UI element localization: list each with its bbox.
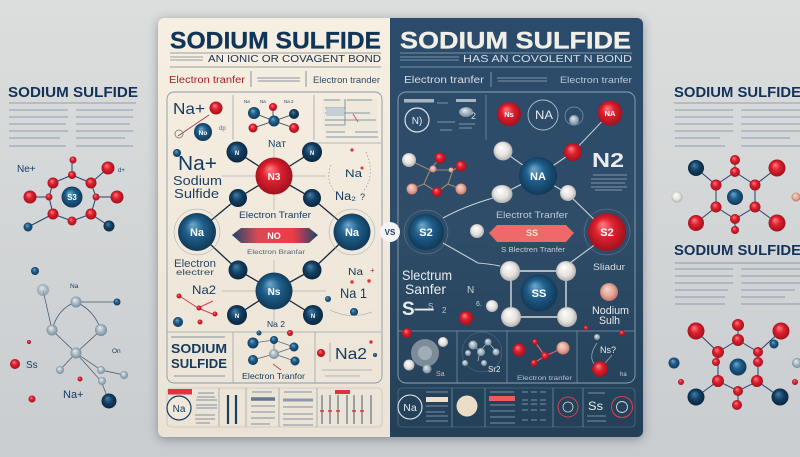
atom: big Na left: Na bbox=[190, 227, 205, 239]
electron transfer label blue: Electron trander bbox=[313, 75, 380, 86]
cell: grey cluster bbox=[402, 328, 448, 378]
icon: red ring bbox=[558, 397, 578, 417]
centre note atoms: 6. bbox=[476, 301, 482, 308]
mini chart top right bbox=[322, 99, 378, 137]
molecule: grey ring: Ss bbox=[26, 360, 38, 371]
right header rules bbox=[400, 53, 632, 67]
double arrow: NO bbox=[267, 231, 281, 241]
na plus sodium sulfide label: Sulfide bbox=[174, 186, 219, 201]
sodium ion note: No bbox=[199, 130, 207, 137]
electron transfer label: Electron tranfer bbox=[404, 75, 485, 86]
molecule: hexagon with S3 core: Ne+ bbox=[17, 164, 36, 175]
cell: Na2 label: Na2 bbox=[335, 346, 367, 363]
right central molecule bbox=[404, 142, 630, 327]
tile: text bars bbox=[426, 397, 448, 402]
lower left electron note bbox=[173, 258, 218, 327]
small navy atoms bbox=[226, 142, 323, 325]
mini molecule top centre: Na 2 bbox=[284, 99, 294, 104]
right bottom tiles bbox=[398, 388, 635, 427]
N2 label bbox=[591, 150, 627, 190]
top row atoms: NA bbox=[535, 108, 553, 122]
atom: S2 red: S2 bbox=[600, 227, 614, 239]
centre note atoms bbox=[459, 285, 498, 325]
icon: Na circle: Na bbox=[173, 404, 186, 415]
electron transfer caption: Electrot Tranfer bbox=[496, 210, 568, 220]
icon: Na ring bbox=[398, 395, 422, 419]
molecule: red ring with S5 core bbox=[672, 155, 800, 234]
cell: Ns label: ha bbox=[620, 372, 627, 378]
tile: red bar bbox=[489, 396, 515, 401]
right note: nodium sulfide: Nodium bbox=[592, 305, 629, 317]
atom: Ns core: Ns bbox=[268, 287, 281, 298]
double arrow bbox=[232, 228, 318, 243]
right note: nodium sulfide: Sulh bbox=[599, 315, 620, 327]
left panel subtitle: AN IONIC OR COVAGENT BOND bbox=[208, 53, 381, 65]
cell: red cluster bbox=[512, 339, 573, 382]
right sidebar: sodium sulfide summary bbox=[668, 85, 800, 410]
right frame dividers bbox=[398, 95, 635, 383]
atoms: four whites bbox=[500, 261, 577, 327]
sidebar title: SODIUM SULFIDE bbox=[8, 85, 138, 101]
mini molecule top centre bbox=[244, 99, 299, 133]
molecule: grey ring bbox=[10, 267, 128, 408]
top left cell with N ring: N) bbox=[412, 116, 422, 127]
left panel title: SODIUM SULFIDE bbox=[170, 28, 381, 54]
sodium ion note bbox=[173, 101, 226, 141]
atom: red N3 bbox=[256, 158, 292, 194]
left note: slectrum sanfer: 2 bbox=[442, 306, 447, 315]
electron transfer label red: Electron tranfer bbox=[169, 75, 246, 86]
lower right Na notes: Na 1 bbox=[340, 285, 367, 301]
vs badge: VS bbox=[385, 228, 396, 237]
header fake text and divider bbox=[491, 72, 547, 87]
bracket square bonds bbox=[510, 271, 566, 317]
atom: big Na right bbox=[329, 209, 375, 255]
atom: SS core: SS bbox=[532, 288, 546, 300]
cell: red cluster: Electron tranfer bbox=[517, 375, 573, 382]
icon: Na ring: Na bbox=[403, 402, 417, 414]
double arrow bbox=[489, 225, 574, 242]
lower left electron note: electrer bbox=[176, 268, 214, 277]
tile: red tag bbox=[168, 389, 192, 394]
sub caption: S Blectren Tranfer bbox=[501, 247, 566, 254]
atoms: upper whites and red bbox=[470, 142, 582, 238]
tile: table bars bbox=[283, 398, 313, 402]
right note: nodium sulfide bbox=[592, 262, 629, 327]
sodium ion note: dp bbox=[219, 126, 226, 132]
molecule: hexagon with S3 core bbox=[17, 156, 125, 232]
sidebar text block one bbox=[674, 103, 800, 146]
sidebar text block two bbox=[675, 263, 800, 304]
right note: nodium sulfide: Sliadur bbox=[593, 262, 625, 272]
atom: S2 red bbox=[584, 209, 630, 255]
icon: red ring two bbox=[612, 396, 632, 418]
na plus sodium sulfide label bbox=[173, 149, 222, 201]
lower left electron note: Na2 bbox=[192, 283, 216, 297]
cell: sodium sulfide label bbox=[171, 337, 227, 376]
molecule: grey ring: On bbox=[112, 348, 121, 355]
header fake text and dividers bbox=[251, 71, 306, 87]
cell: network molecule bbox=[462, 332, 502, 374]
left inner frame bbox=[167, 92, 382, 383]
left note: slectrum sanfer: S— bbox=[402, 299, 434, 320]
na plus sodium sulfide label: Na+ bbox=[178, 153, 217, 175]
cell: Ns label: Ns? bbox=[600, 345, 616, 355]
cross hair guide lines bbox=[222, 145, 326, 325]
small navy atoms: N bbox=[235, 314, 239, 320]
small navy atoms: N bbox=[310, 151, 314, 157]
lower right Na notes: Na bbox=[348, 267, 363, 278]
atom: SS core bbox=[520, 274, 558, 312]
mini molecule top centre: Na bbox=[260, 99, 266, 104]
atom: S2 blue bbox=[404, 210, 448, 254]
Na labels right upper: Naт bbox=[268, 139, 286, 150]
right panel subtitle: HAS AN COVOLENT N BOND bbox=[463, 53, 632, 65]
top left cell with N ring: 2 bbox=[471, 111, 476, 121]
top row atoms: NA bbox=[605, 109, 616, 118]
Na labels right upper: Na bbox=[345, 168, 363, 180]
Na labels right upper: Na₂ bbox=[335, 191, 356, 203]
mini molecule top centre: Na bbox=[244, 99, 250, 104]
panel: covalent bond (navy) bbox=[390, 18, 643, 437]
cell: sodium sulfide label: SULFIDE bbox=[171, 356, 227, 371]
atom: NA core bbox=[519, 157, 557, 195]
right panel title: SODIUM SULFIDE bbox=[400, 28, 631, 54]
atom: S2 blue: S2 bbox=[419, 227, 433, 239]
sub caption: Electron Branfar bbox=[247, 249, 306, 256]
cell: molecule and label: Na 2 bbox=[267, 319, 285, 329]
left hexagonal molecule bbox=[402, 152, 466, 197]
cell: network molecule: Sr2 bbox=[488, 365, 501, 374]
lower right Na notes bbox=[325, 266, 375, 316]
left note: slectrum sanfer: Sanfer bbox=[405, 281, 446, 297]
Na labels right upper: ? bbox=[360, 192, 365, 202]
left note: slectrum sanfer bbox=[402, 267, 452, 322]
cell: sodium sulfide label: SODIUM bbox=[171, 341, 227, 356]
left bottom tiles bbox=[167, 388, 382, 427]
panel: ionic bond (cream) bbox=[158, 18, 390, 437]
tile: horizontal bars bbox=[251, 397, 275, 401]
cell: molecule and label bbox=[242, 319, 305, 381]
molecule: red ring with S1 core bbox=[668, 319, 800, 410]
atom: Ns core bbox=[256, 272, 292, 310]
sidebar title two: SODIUM SULFIDE bbox=[674, 243, 800, 259]
atom: red N3: N3 bbox=[268, 172, 281, 183]
Na labels right upper bbox=[268, 139, 370, 203]
atom: NA core: NA bbox=[530, 171, 546, 183]
tile: vertical scale bbox=[320, 390, 371, 424]
atom: big Na left bbox=[174, 209, 220, 255]
left note: slectrum sanfer: S bbox=[428, 302, 433, 311]
electron transfer caption: Electron Tranfer bbox=[239, 210, 311, 220]
icon: Na circle bbox=[167, 396, 191, 420]
na plus sodium sulfide label: Sodium bbox=[173, 173, 222, 188]
vs badge bbox=[380, 222, 400, 242]
bonds bbox=[197, 152, 352, 315]
sidebar text columns bbox=[9, 103, 136, 146]
cell: Na2 label bbox=[317, 340, 377, 376]
electron transfer label two: Electron tranfer bbox=[560, 75, 632, 86]
cell: molecule and label: Electron Tranfor bbox=[242, 371, 305, 381]
molecule: hexagon with S3 core: d+ bbox=[118, 168, 125, 174]
molecule: hexagon with S3 core: S3 bbox=[67, 193, 77, 202]
left sidebar: sodium sulfide summary bbox=[8, 85, 138, 408]
left central molecule bbox=[174, 142, 375, 325]
N2 label: N2 bbox=[592, 150, 624, 172]
panel shadow for both halves bbox=[158, 18, 643, 437]
icon: cream circle bbox=[456, 396, 478, 416]
top left cell with N ring bbox=[404, 99, 476, 132]
sodium ion note: Na+ bbox=[173, 101, 205, 118]
Ss label: Ss bbox=[588, 401, 603, 413]
small navy atoms: N bbox=[311, 314, 315, 320]
top row atoms: Ns bbox=[504, 110, 514, 119]
cell: grey cluster: Sa bbox=[436, 371, 445, 378]
small navy atoms: N bbox=[235, 151, 239, 157]
right inner frame bbox=[398, 92, 635, 383]
tile: table bbox=[522, 392, 548, 420]
lower right Na notes: + bbox=[370, 266, 375, 275]
left header rules bbox=[170, 53, 381, 67]
left frame cell dividers bbox=[167, 95, 381, 383]
top row atoms bbox=[497, 100, 622, 152]
tile: vertical bars bbox=[228, 395, 236, 424]
bonds bbox=[443, 151, 608, 266]
double arrow: SS bbox=[526, 228, 538, 238]
centre note atoms: N bbox=[467, 285, 474, 296]
sidebar title one: SODIUM SULFIDE bbox=[674, 85, 800, 101]
molecule: grey ring: Na bbox=[70, 283, 79, 290]
cell: Ns label bbox=[584, 326, 627, 378]
tile: text bars bbox=[195, 393, 217, 423]
lower left electron note: Electron bbox=[174, 258, 216, 270]
molecule: grey ring: Na+ bbox=[63, 389, 84, 401]
atom: big Na right: Na bbox=[345, 227, 360, 239]
left note: slectrum sanfer: Slectrum bbox=[402, 267, 452, 283]
